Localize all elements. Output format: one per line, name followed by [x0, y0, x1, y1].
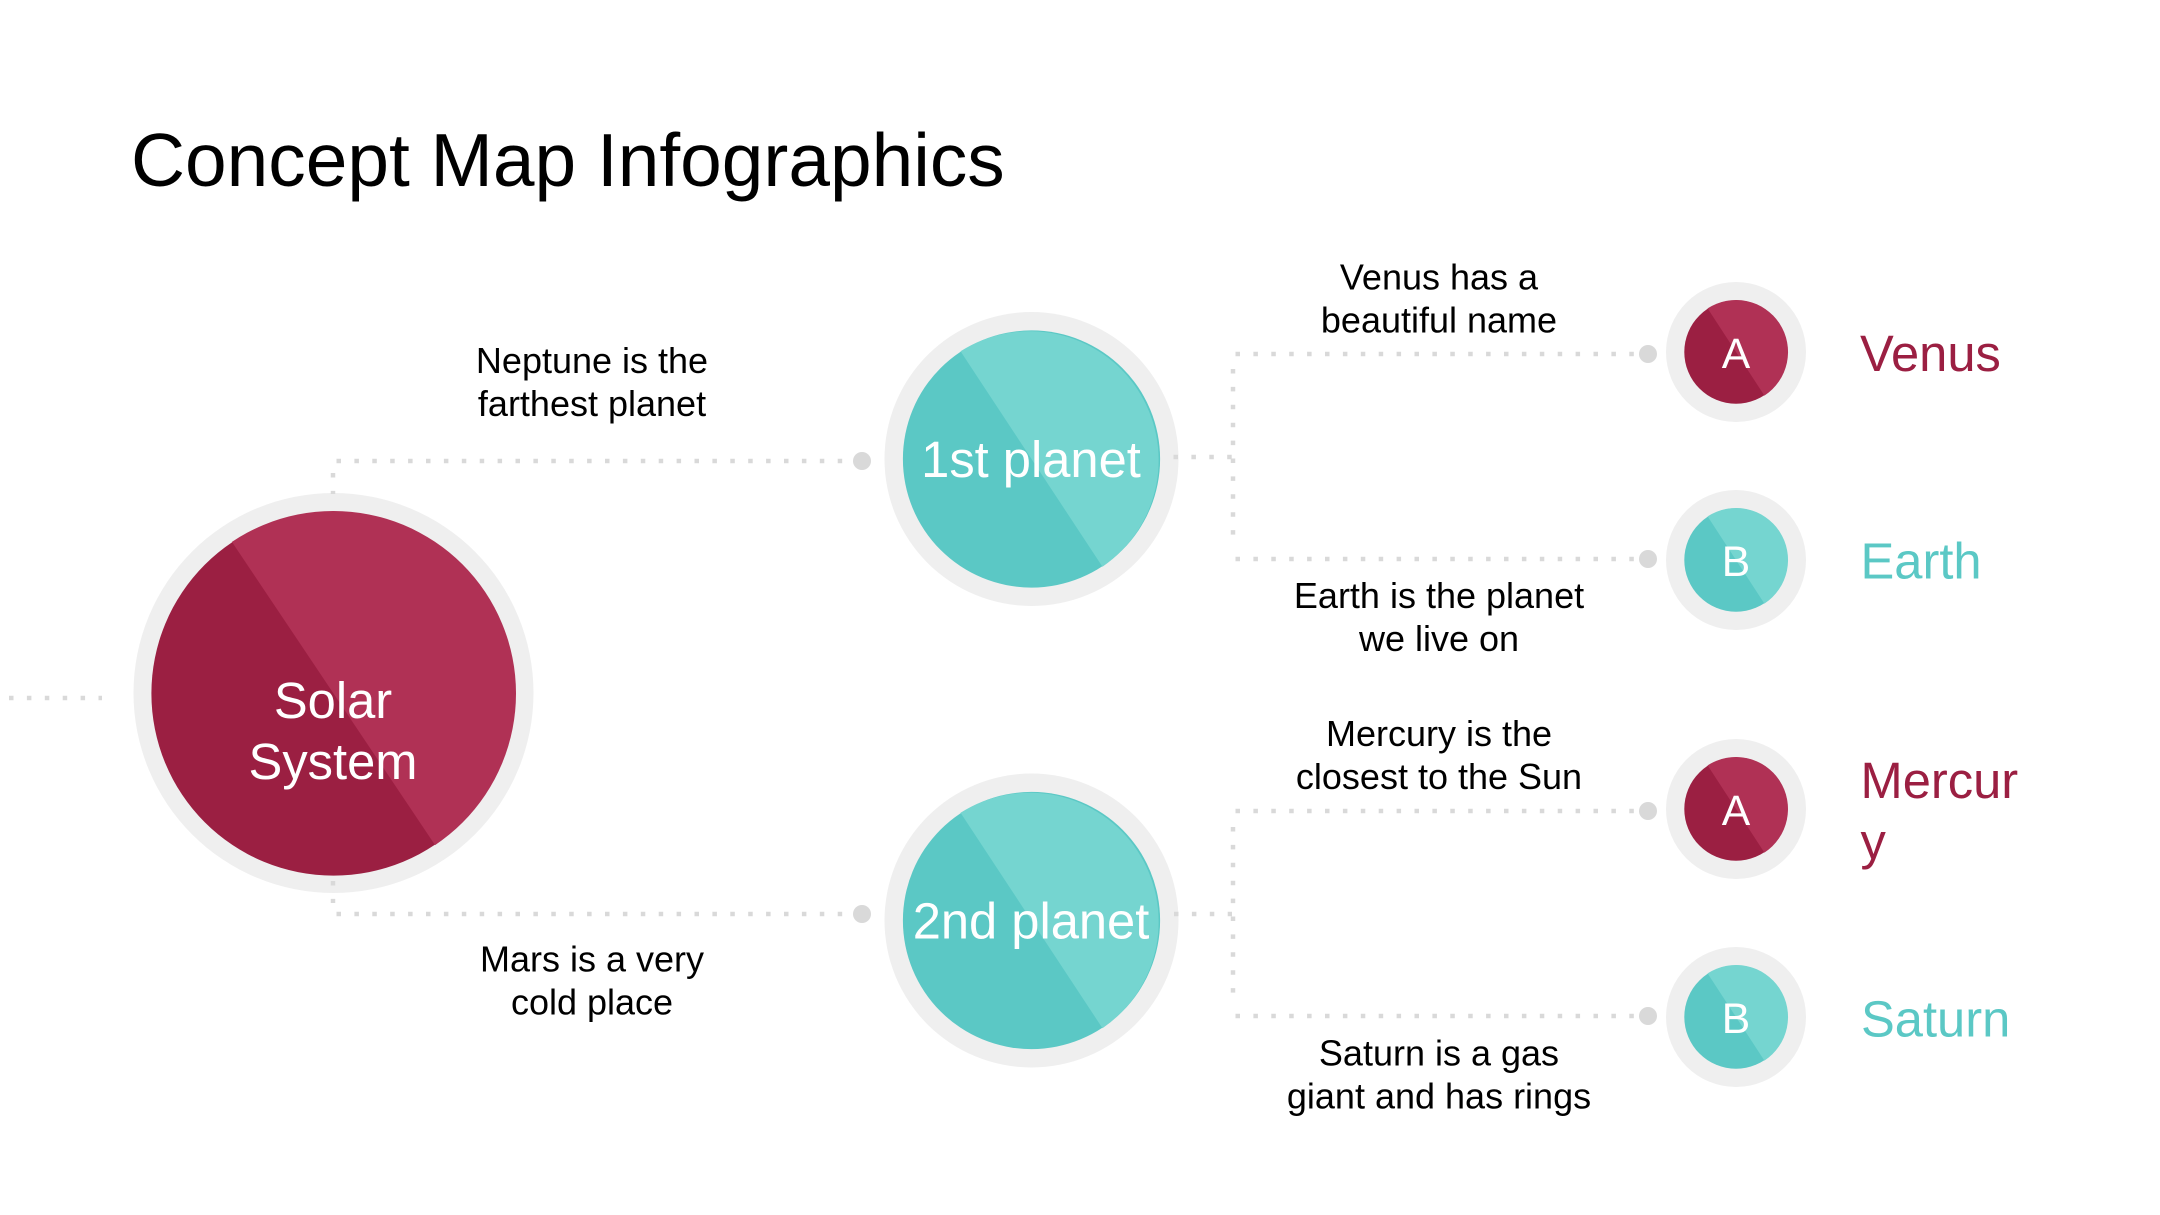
text: Mercury description [1296, 713, 1582, 797]
text: Venus description: beautiful name [1321, 300, 1557, 340]
text: Neptune description: Neptune is the [476, 340, 708, 381]
connector: 1st planet to Venus and Earth [1174, 345, 1657, 568]
text: Saturn description [1287, 1032, 1591, 1116]
label: Mercury: y [1860, 813, 1886, 870]
label: Earth: Earth [1860, 532, 1982, 590]
node: 2nd planet [903, 792, 1160, 1049]
text: Venus description: Venus has a [1340, 256, 1539, 298]
node: A Mercury [1666, 739, 1806, 879]
text: Mars description [480, 938, 704, 1022]
node: 2nd planet: 2nd planet [913, 892, 1149, 950]
node: B Earth [1666, 490, 1806, 630]
node: B Saturn: B [1722, 995, 1750, 1043]
node: 1st planet [903, 330, 1160, 588]
text: Mars description: cold place [511, 982, 673, 1022]
ring: Solar System [134, 493, 534, 893]
node: Solar System: System [249, 733, 417, 790]
ring: 1st planet [884, 312, 1178, 606]
text: Earth description: Earth is the planet [1294, 575, 1584, 616]
text: Mercury description: closest to the Sun [1296, 756, 1582, 797]
text: Venus description [1321, 256, 1557, 340]
title: Concept Map Infographics [131, 118, 1005, 202]
node: Solar System: Solar [274, 672, 392, 729]
text: Saturn description: giant and has rings [1287, 1076, 1591, 1116]
ring: 2nd planet [884, 774, 1178, 1068]
text: Mercury description: Mercury is the [1326, 713, 1552, 754]
node: A Venus: A [1722, 330, 1751, 378]
label: Mercury: Mercur [1860, 752, 2018, 809]
node: B Saturn [1666, 947, 1806, 1087]
text: Mars description: Mars is a very [480, 938, 704, 980]
text: Neptune description [476, 340, 708, 424]
node: Solar System [151, 511, 516, 876]
node: B Earth: B [1722, 538, 1750, 586]
connector: left incoming [9, 696, 102, 700]
node: A Mercury: A [1722, 787, 1751, 835]
label: Venus: Venus [1860, 325, 2001, 382]
node: A Venus [1666, 282, 1806, 422]
connector: 2nd planet to Mercury and Saturn [1174, 802, 1657, 1025]
text: Neptune description: farthest planet [478, 383, 706, 424]
connector: Solar System to 1st planet [333, 452, 871, 494]
label: Mercury [1860, 752, 2018, 870]
label: Saturn: Saturn [1861, 990, 2010, 1048]
text: Earth description: we live on [1358, 618, 1519, 659]
connector: Solar System to 2nd planet [333, 881, 871, 923]
text: Earth description [1294, 575, 1584, 659]
text: Saturn description: Saturn is a gas [1319, 1032, 1559, 1074]
node: 1st planet: 1st planet [921, 431, 1141, 488]
